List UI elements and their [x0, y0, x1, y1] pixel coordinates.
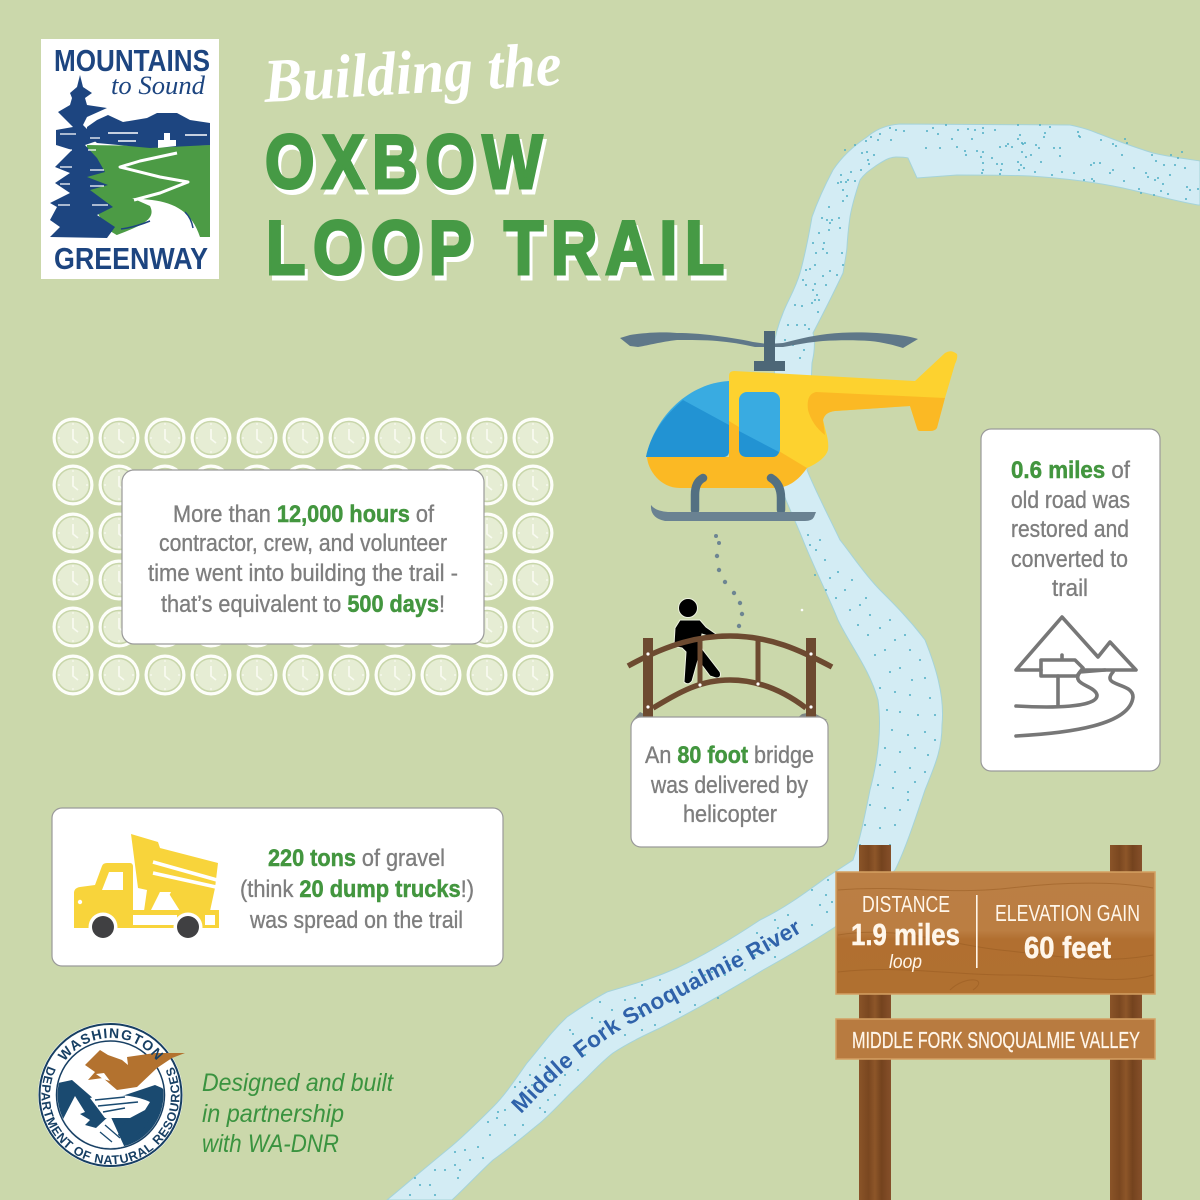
panel: gravel and dump trucks [52, 808, 503, 966]
river label: Middle Fork Snoqualmie River [510, 922, 799, 1114]
sign board: distance and elevation: 60 feet [1024, 930, 1111, 965]
icon: dump truck [74, 834, 219, 942]
seal: Washington Department of Natural Resources: WASHINGTON [57, 1028, 164, 1060]
sign board: distance and elevation [836, 872, 1155, 994]
panel: 80 foot bridge: helicopter [683, 801, 777, 828]
sign board: distance and elevation: ELEVATION GAIN [995, 900, 1140, 926]
clock grid [52, 418, 554, 696]
icon: wooden bridge [628, 636, 832, 720]
seal scene: mountains, fields and salmon [58, 1080, 164, 1148]
icon: person crossing bridge [674, 598, 720, 684]
panel: 12,000 hours [122, 470, 484, 644]
dotted sling line [714, 534, 803, 628]
title: Oxbow: OXBOW [265, 120, 550, 205]
title shadow: Loop Trail: LOOP TRAIL [269, 211, 735, 296]
partnership credit: in partnership [202, 1100, 344, 1128]
wooden sign [836, 845, 1155, 1200]
panel: 12,000 hours: More than 12,000 hours of [173, 501, 434, 528]
panel: 12,000 hours: time went into building the trail - [148, 560, 458, 587]
panel: gravel and dump trucks: was spread on the trail [249, 907, 463, 934]
panel: 0.6 miles of road: 0.6 miles of [1011, 457, 1130, 484]
seal: Washington Department of Natural Resources: DEPARTMENT OF NATURAL RESOURCES [41, 1066, 180, 1164]
sign posts [859, 845, 1142, 1200]
river: Middle Fork Snoqualmie [387, 124, 1200, 1200]
logo: Mountains to Sound Greenway: GREENWAY [54, 241, 208, 276]
sign board: distance and elevation: 1.9 miles [851, 917, 960, 952]
panel: 0.6 miles of road [981, 429, 1160, 771]
logo: Mountains to Sound Greenway: MOUNTAINS [54, 43, 210, 78]
logo: Mountains to Sound Greenway: to Sound [111, 71, 206, 100]
title script: Building the: Building the [261, 30, 563, 116]
logo: Mountains to Sound Greenway [41, 39, 219, 279]
seal eagle [85, 1050, 185, 1090]
partnership credit [202, 1069, 394, 1158]
icon: mountains, signpost and trail [1016, 617, 1136, 736]
panel: gravel and dump trucks: (think 20 dump trucks!) [240, 876, 474, 903]
title [261, 30, 735, 296]
title shadow: Oxbow: OXBOW [268, 125, 553, 210]
partnership credit: with WA-DNR [202, 1130, 339, 1158]
icon: helicopter [620, 331, 957, 521]
seal: Washington Department of Natural Resources [38, 1022, 185, 1168]
panel: 80 foot bridge [631, 717, 828, 847]
sign board: valley name [836, 1019, 1155, 1059]
panel: gravel and dump trucks: 220 tons of gravel [268, 845, 445, 872]
panel: 12,000 hours: contractor, crew, and volunteer [159, 530, 447, 557]
panel: 80 foot bridge: An 80 foot bridge [645, 742, 814, 769]
panel: 0.6 miles of road: restored and [1011, 516, 1129, 543]
partnership credit: Designed and built [202, 1069, 394, 1097]
title: Loop Trail: LOOP TRAIL [266, 206, 732, 291]
panel: 0.6 miles of road: converted to [1011, 546, 1128, 573]
panel: 12,000 hours: that’s equivalent to 500 days! [161, 591, 445, 618]
panel: 0.6 miles of road: trail [1052, 575, 1088, 602]
sign board: distance and elevation: loop [889, 952, 922, 973]
sign board: distance and elevation: DISTANCE [862, 891, 950, 917]
panel: 0.6 miles of road: old road was [1011, 487, 1130, 514]
panel: 80 foot bridge: was delivered by [650, 772, 808, 799]
